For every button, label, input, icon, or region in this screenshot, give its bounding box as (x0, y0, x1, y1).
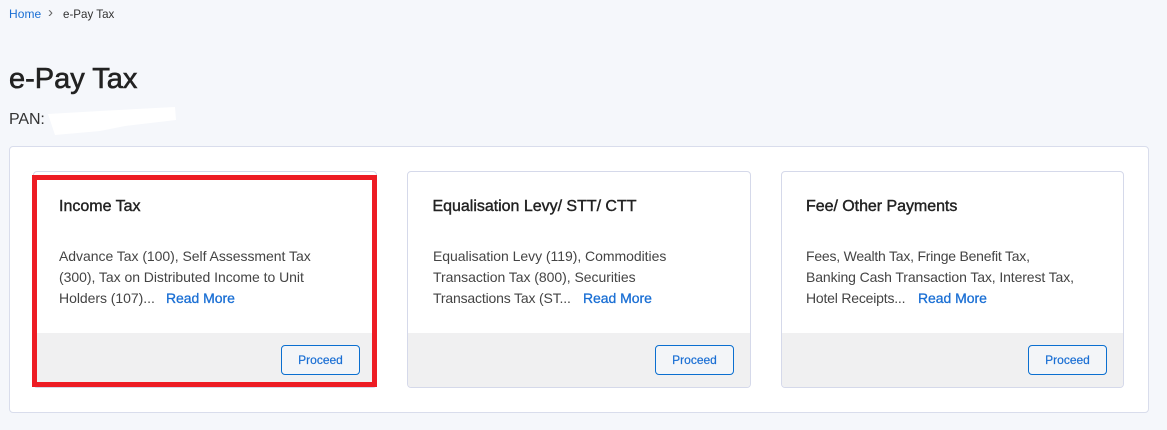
breadcrumb: e-Pay Tax (63, 8, 114, 21)
footer (408, 333, 750, 388)
description: Hotel Receipts... (806, 290, 905, 306)
heading: Income Tax (59, 198, 141, 215)
proceed button (1028, 345, 1107, 375)
proceed button: Proceed (672, 353, 717, 367)
description: Holders (107)... (59, 290, 155, 306)
footer (782, 333, 1123, 388)
description (433, 248, 666, 306)
description: Transaction Tax (800), Securities (433, 269, 636, 285)
red highlight box (32, 175, 377, 387)
proceed button (655, 345, 734, 375)
proceed button (281, 345, 360, 375)
breadcrumb: Home (9, 7, 41, 21)
description (806, 248, 1074, 306)
description: Transactions Tax (ST... (433, 290, 571, 306)
card: Fee / Other Payments (781, 171, 1124, 388)
description: Advance Tax (100), Self Assessment Tax (59, 248, 311, 264)
card: Equalisation Levy (407, 171, 751, 388)
PAN label: PAN: (9, 111, 45, 128)
proceed button: Proceed (1045, 353, 1090, 367)
description: Read More (166, 290, 235, 306)
description: Read More (583, 290, 652, 306)
description: Equalisation Levy (119), Commodities (433, 248, 666, 264)
description: (300), Tax on Distributed Income to Unit (59, 269, 304, 285)
proceed button: Proceed (298, 353, 343, 367)
description: Fees, Wealth Tax, Fringe Benefit Tax, (806, 248, 1030, 264)
heading: Equalisation Levy/ STT/ CTT (432, 198, 636, 215)
main panel (9, 146, 1149, 413)
description: Banking Cash Transaction Tax, Interest Tax, (806, 269, 1074, 285)
description (59, 248, 311, 306)
heading: Fee/ Other Payments (806, 198, 957, 215)
description: Read More (918, 290, 987, 306)
footer (34, 333, 376, 388)
breadcrumb: › (48, 4, 53, 21)
page title: e-Pay Tax (9, 63, 137, 95)
card: Income Tax (33, 171, 377, 388)
breadcrumb (9, 4, 114, 21)
